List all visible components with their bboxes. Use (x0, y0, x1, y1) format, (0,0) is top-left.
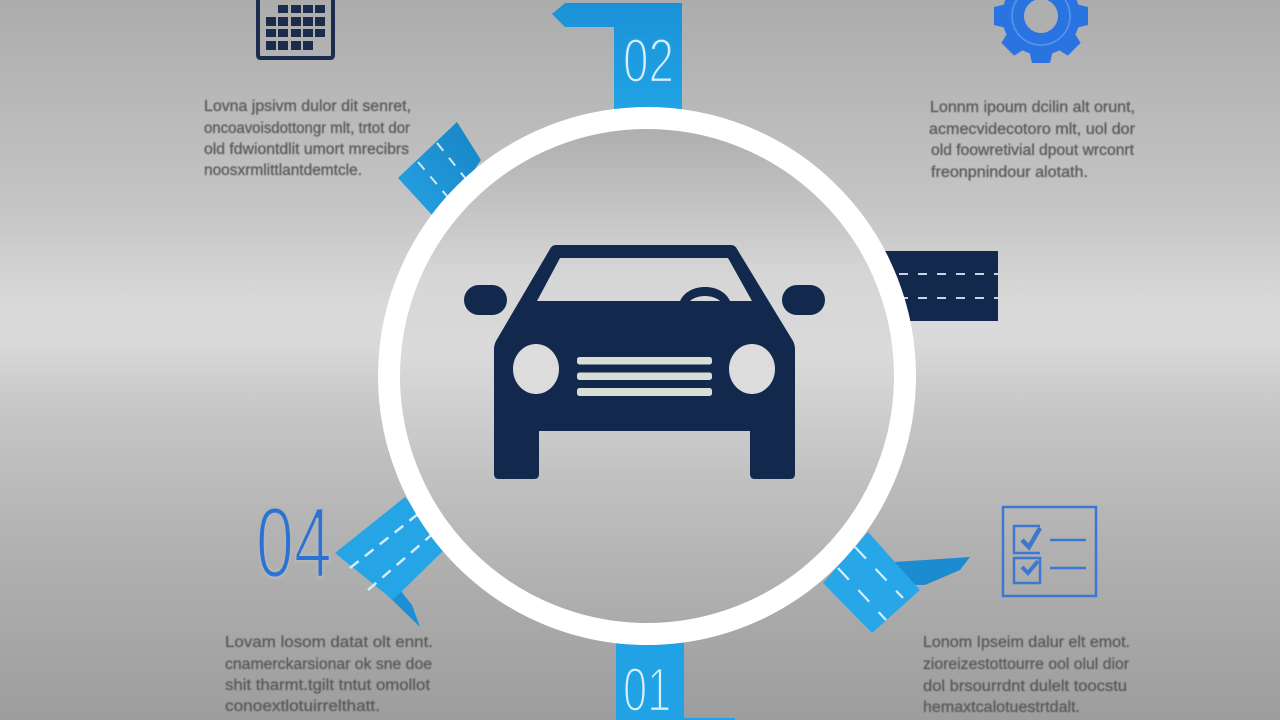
text block: bottom left: shit tharmt.tgilt tntut omollot (225, 677, 431, 694)
car grille (577, 357, 712, 396)
text block: top right: freonpnindour alotath. (931, 164, 1088, 181)
icon: checklist (1003, 507, 1096, 596)
flag: step 02 (552, 3, 682, 112)
text block: top left: oncoavoisdottongr mlt, trtot dor (204, 120, 410, 137)
icon: gear (994, 0, 1088, 63)
road: bottom left (335, 497, 446, 627)
text block: bottom right: hemaxtcalotuestrtdalt. (923, 699, 1080, 716)
car headlights (513, 344, 775, 394)
icon: calendar (258, 0, 333, 58)
number: 02: 02 (623, 26, 674, 96)
text block: top right: old foowretivial dpout wrconrt (931, 142, 1135, 159)
text block: bottom right: dol brsourrdnt dulelt toocstu (923, 678, 1127, 695)
text block: top left (204, 98, 411, 179)
text block: bottom left: Lovam losom datat olt ennt. (225, 634, 433, 651)
number: 04: 04 (256, 488, 332, 599)
text block: bottom left: conoextlotuirrelthatt. (225, 698, 380, 715)
text block: bottom left: cnamerckarsionar ok sne doe (225, 656, 432, 673)
text block: bottom left (225, 634, 433, 715)
road: bottom right (823, 532, 970, 633)
flag: step 01 (616, 640, 735, 720)
ring: central circle (389, 118, 905, 634)
car mirrors (464, 285, 825, 315)
text block: bottom right (923, 634, 1130, 716)
text block: bottom right: zioreizestottourre ool olul dior (923, 656, 1129, 673)
icon: car (464, 245, 825, 479)
text block: top left: noosxrmlittlantdemtcle. (204, 162, 362, 179)
text block: top right: acmecvidecotoro mlt, uol dor (929, 121, 1135, 138)
road: right (dark) (870, 251, 998, 321)
text block: top left: Lovna jpsivm dulor dit senret, (204, 98, 411, 115)
text block: top right: Lonnm ipoum dcilin alt orunt, (930, 99, 1135, 116)
road: top left (398, 122, 481, 220)
text block: top right (929, 99, 1135, 181)
text block: bottom right: Lonom Ipseim dalur elt emot. (923, 634, 1130, 651)
text block: top left: old fdwiontdlit umort mrecibrs (204, 141, 409, 158)
